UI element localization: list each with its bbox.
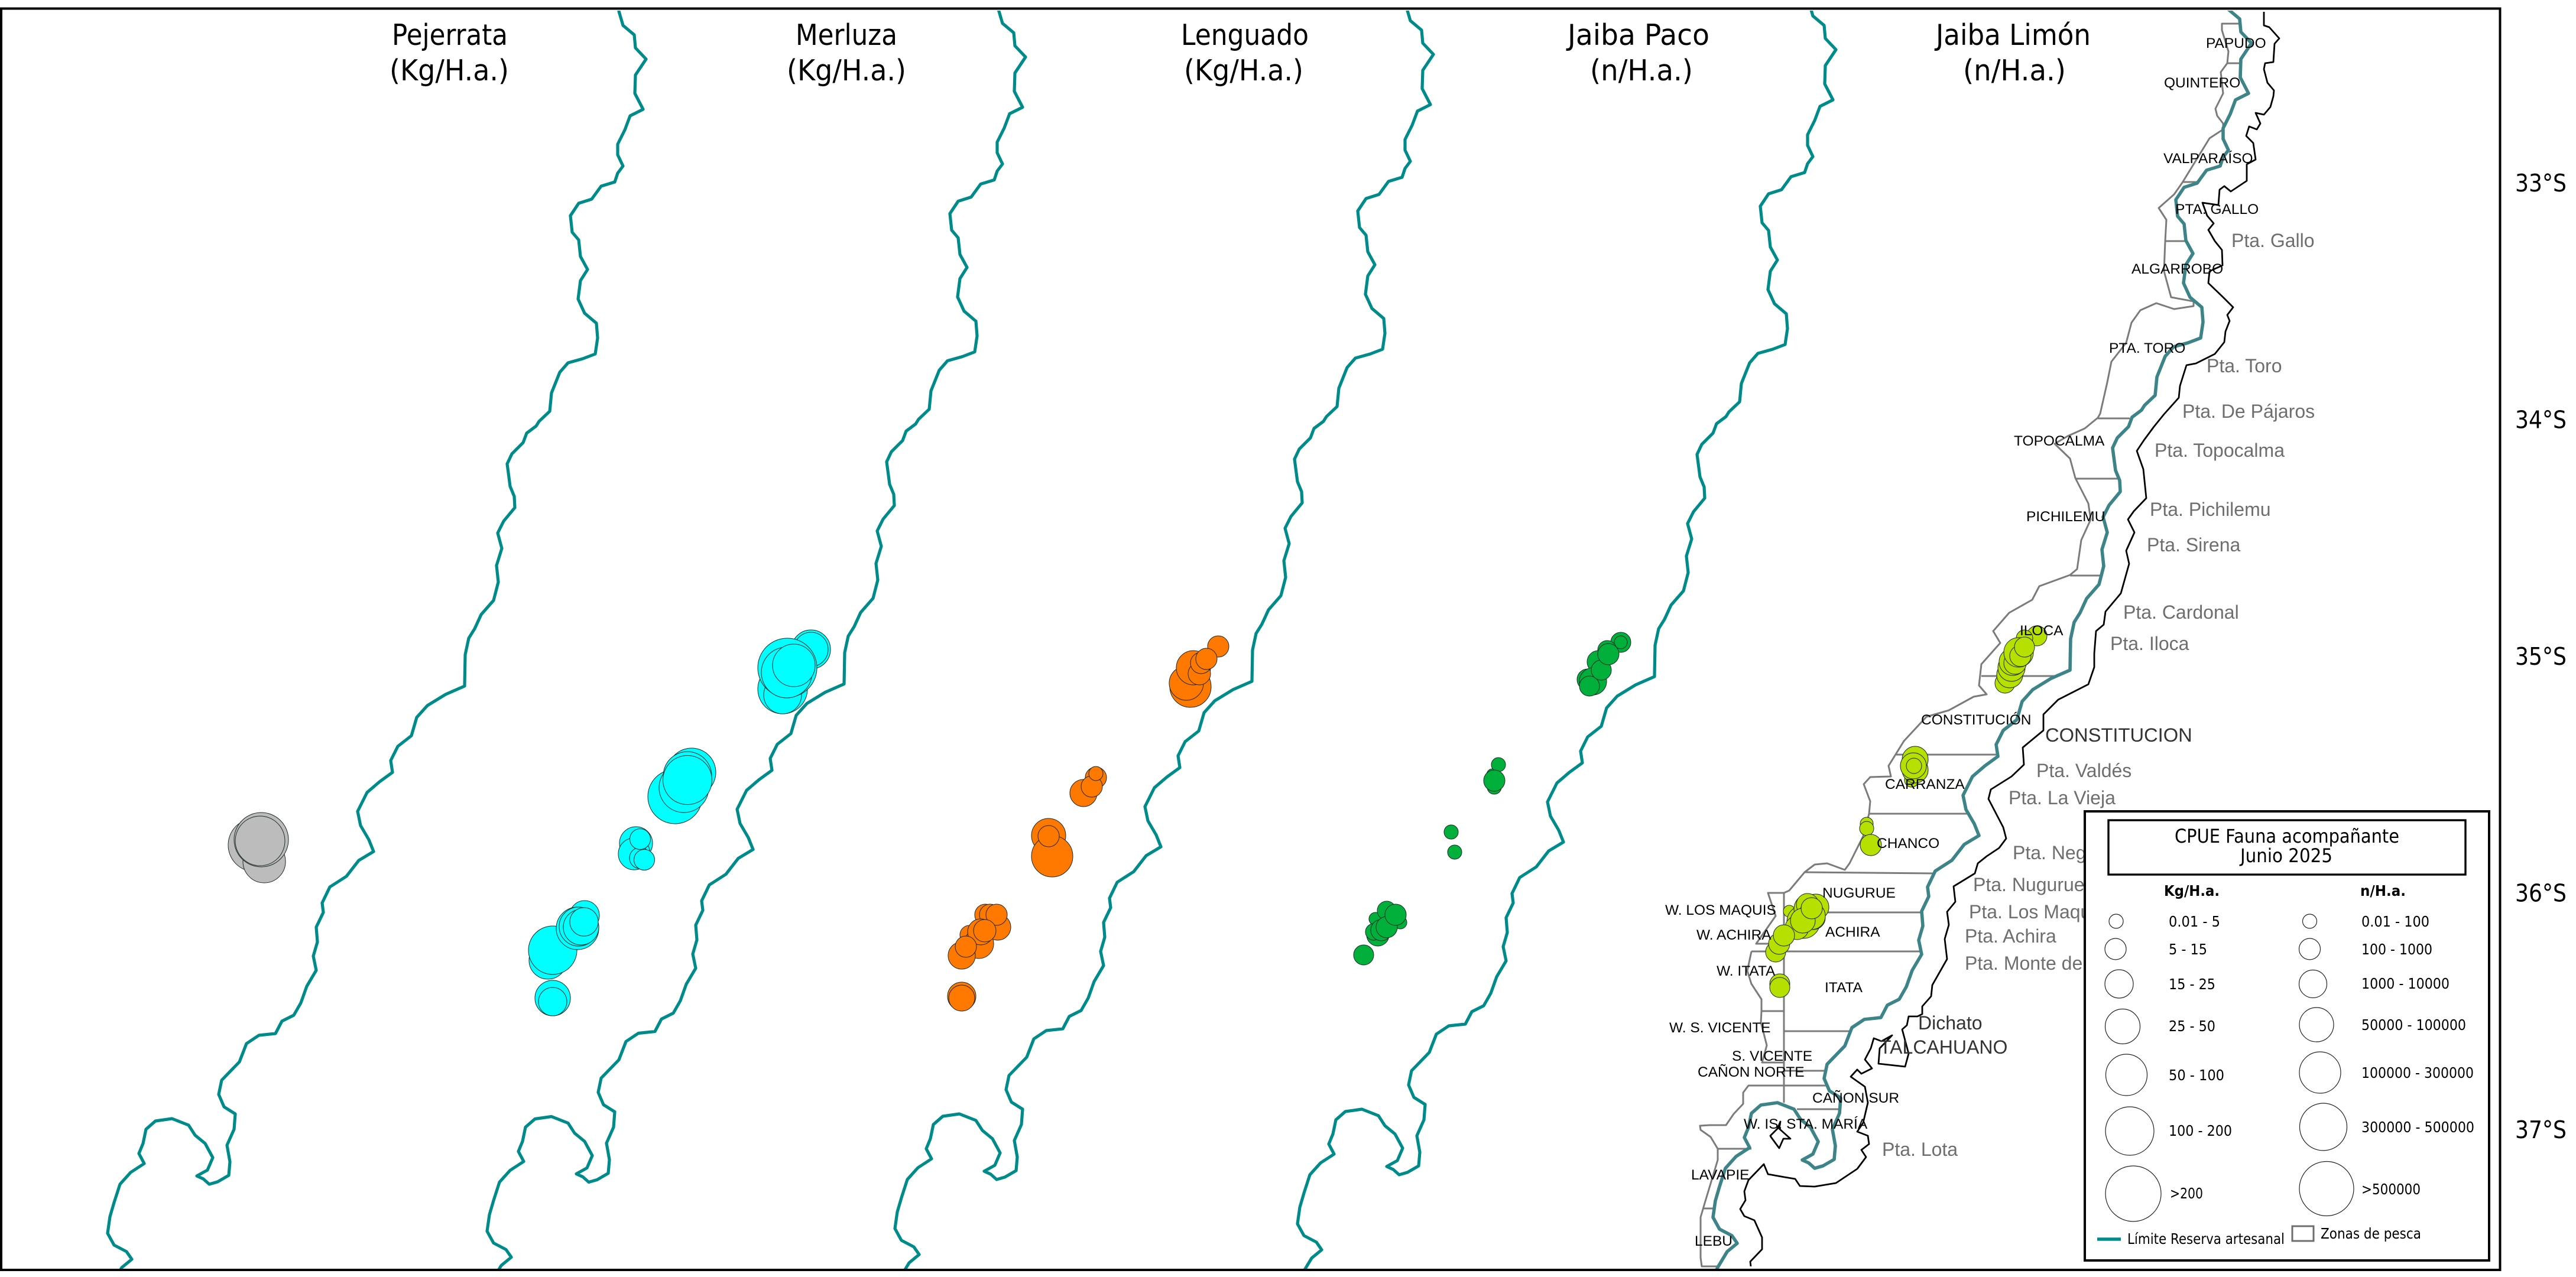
coastline [1740,12,2279,1266]
latitude labels: 36°S [2515,879,2567,908]
bubbles: Jaiba Paco catches [1354,632,1631,965]
coastal place labels: Pta. La Vieja [2009,787,2116,808]
coastal place labels: Pta. Gallo [2231,230,2315,251]
legend column: n/H.a.: 1000 - 10000 [2361,975,2450,992]
fishing zone labels: PAPUDO [2206,35,2266,51]
legend column: n/H.a.: >500000 [2361,1181,2421,1198]
latitude labels: 35°S [2515,642,2567,671]
reserve limit line: Pejerrata [106,11,646,1277]
fishing zone labels: ITATA [1825,980,1863,996]
fishing zone labels: W. S. VICENTE [1669,1020,1771,1036]
coastal place labels: Pta. De Pájaros [2182,401,2315,422]
heading: Lenguado: Lenguado [1181,18,1309,52]
bubbles: Lenguado catches [948,636,1229,1011]
fishing zone labels: CARRANZA [1885,776,1965,792]
fishing zone labels: CAÑON SUR [1812,1090,1899,1106]
heading: Jaiba Paco: Jaiba Paco [1566,18,1709,52]
coastal place labels: Pta. Monte de [1965,953,2082,974]
heading: Merluza [787,18,906,87]
heading: Lenguado: (Kg/H.a.) [1184,54,1303,87]
fishing zone labels: ILOCA [2020,623,2064,639]
coastal place labels: Dichato [1918,1012,1983,1034]
coastal place labels: CONSTITUCION [2045,724,2192,746]
map: Lenguado panel [894,7,1433,1277]
coastal place labels: Pta. Nugurue [1973,874,2085,895]
map: Jaiba Paco panel [1296,2,1836,1277]
reserve limit line: Jaiba Limón [1712,0,2251,1277]
fishing zone labels: TOPOCALMA [2014,433,2105,449]
fishing zone labels: W. LOS MAQUIS [1665,902,1776,918]
fishing zones [1700,24,2241,1266]
legend column: n/H.a.: 0.01 - 100 [2361,913,2429,930]
heading: Pejerrata: (Kg/H.a.) [390,54,509,87]
fishing zone labels: PTA. GALLO [2175,202,2259,217]
map: Pejerrata panel [106,11,646,1277]
map: Jaiba Limón panel with fishing zones [1665,0,2315,1277]
legend column: n/H.a. [2299,882,2474,1216]
fishing zone labels: W. ITATA [1717,963,1776,979]
fishing zone labels: LAVAPIE [1691,1167,1750,1183]
coastal place labels: TALCAHUANO [1880,1036,2007,1058]
coastal place labels: Pta. Achira [1965,925,2056,947]
heading: Jaiba Paco: (n/H.a.) [1590,54,1693,87]
fishing zone labels: CHANCO [1877,836,1939,852]
fishing zone labels: PICHILEMU [2026,509,2105,525]
fishing zone labels: LEBU [1695,1233,1733,1249]
coastal place labels: Pta. Los Maquis [1969,901,2104,922]
latitude labels: 37°S [2515,1116,2567,1144]
legend title box [2108,820,2465,875]
heading: Lenguado [1181,18,1309,87]
heading: Merluza: Merluza [796,18,897,52]
legend column: Kg/H.a.: 25 - 50 [2169,1018,2215,1035]
legend title box: Junio 2025 [2239,844,2332,867]
heading: Merluza: (Kg/H.a.) [787,54,906,87]
bubbles: Pejerrata catches [228,813,288,883]
coastal place labels [1880,230,2315,1160]
legend column: n/H.a.: 100 - 1000 [2361,941,2432,958]
fishing zone labels: CONSTITUCIÓN [1921,712,2031,728]
heading: Jaiba Limón: Jaiba Limón [1934,18,2091,52]
map: Merluza panel [486,9,1026,1277]
heading: Pejerrata: Pejerrata [392,18,508,52]
legend column: n/H.a.: 300000 - 500000 [2361,1119,2474,1136]
bubbles: Merluza catches [528,630,830,1016]
reserve limit line: Lenguado [894,7,1433,1277]
coastal place labels: Pta. Topocalma [2155,440,2285,461]
heading: Pejerrata [390,18,509,87]
coastal place labels: Pta. Negra [2013,842,2103,863]
coastal place labels: Pta. Lota [1882,1139,1958,1160]
coastal place labels: Pta. Valdés [2036,760,2131,781]
panel: legend [2085,811,2489,1260]
fishing zone labels [1665,35,2266,1249]
coastal place labels: Pta. Pichilemu [2150,499,2271,520]
fishing zone labels: ALGARROBO [2131,261,2223,277]
legend item: reserve limit: Límite Reserva artesanal [2127,1230,2285,1247]
fishing zone labels: ACHIRA [1825,924,1880,940]
legend column: Kg/H.a.: 0.01 - 5 [2169,913,2220,930]
latitude labels [2515,169,2567,1144]
fishing zone labels: NUGURUE [1822,885,1896,901]
legend column: n/H.a.: n/H.a. [2360,882,2406,899]
legend item: fishing zones [2292,1225,2421,1242]
coastal place labels: Pta. Sirena [2147,534,2241,555]
legend column: Kg/H.a.: 5 - 15 [2169,941,2207,958]
heading: Jaiba Paco [1566,18,1709,87]
fishing zone labels: VALPARAÍSO [2163,151,2253,167]
legend title box: CPUE Fauna acompañante [2175,825,2399,847]
coastal place labels: Pta. Iloca [2110,633,2189,654]
heading: Jaiba Limón [1934,18,2091,87]
fishing zone labels: CAÑON NORTE [1698,1064,1805,1080]
latitude labels: 34°S [2515,405,2567,434]
coastal place labels: Pta. Toro [2207,355,2282,376]
legend column: Kg/H.a.: >200 [2170,1185,2203,1202]
legend column: Kg/H.a. [2105,882,2232,1221]
legend column: Kg/H.a.: 15 - 25 [2169,976,2215,993]
legend item: fishing zones: Zonas de pesca [2321,1225,2421,1242]
fishing zone labels: QUINTERO [2164,75,2240,91]
fishing zone labels: S. VICENTE [1732,1048,1812,1064]
legend column: Kg/H.a.: Kg/H.a. [2164,882,2220,899]
legend column: n/H.a.: 100000 - 300000 [2361,1064,2474,1081]
legend column: Kg/H.a.: 50 - 100 [2169,1067,2224,1084]
latitude labels: 33°S [2515,169,2567,197]
fishing zone labels: W. IS. STA. MARÍA [1744,1116,1868,1132]
reserve limit line: Merluza [486,9,1026,1277]
coastal place labels: Pta. Cardonal [2123,602,2239,623]
bubbles: Jaiba Limón catches [1766,626,2047,997]
legend column: Kg/H.a.: 100 - 200 [2169,1122,2232,1139]
heading: Jaiba Limón: (n/H.a.) [1963,54,2066,87]
legend column: n/H.a.: 50000 - 100000 [2361,1016,2466,1034]
reserve limit line: Jaiba Paco [1296,2,1836,1277]
fishing zone labels: PTA. TORO [2109,340,2185,356]
fishing zone labels: W. ACHIRA [1696,927,1772,943]
